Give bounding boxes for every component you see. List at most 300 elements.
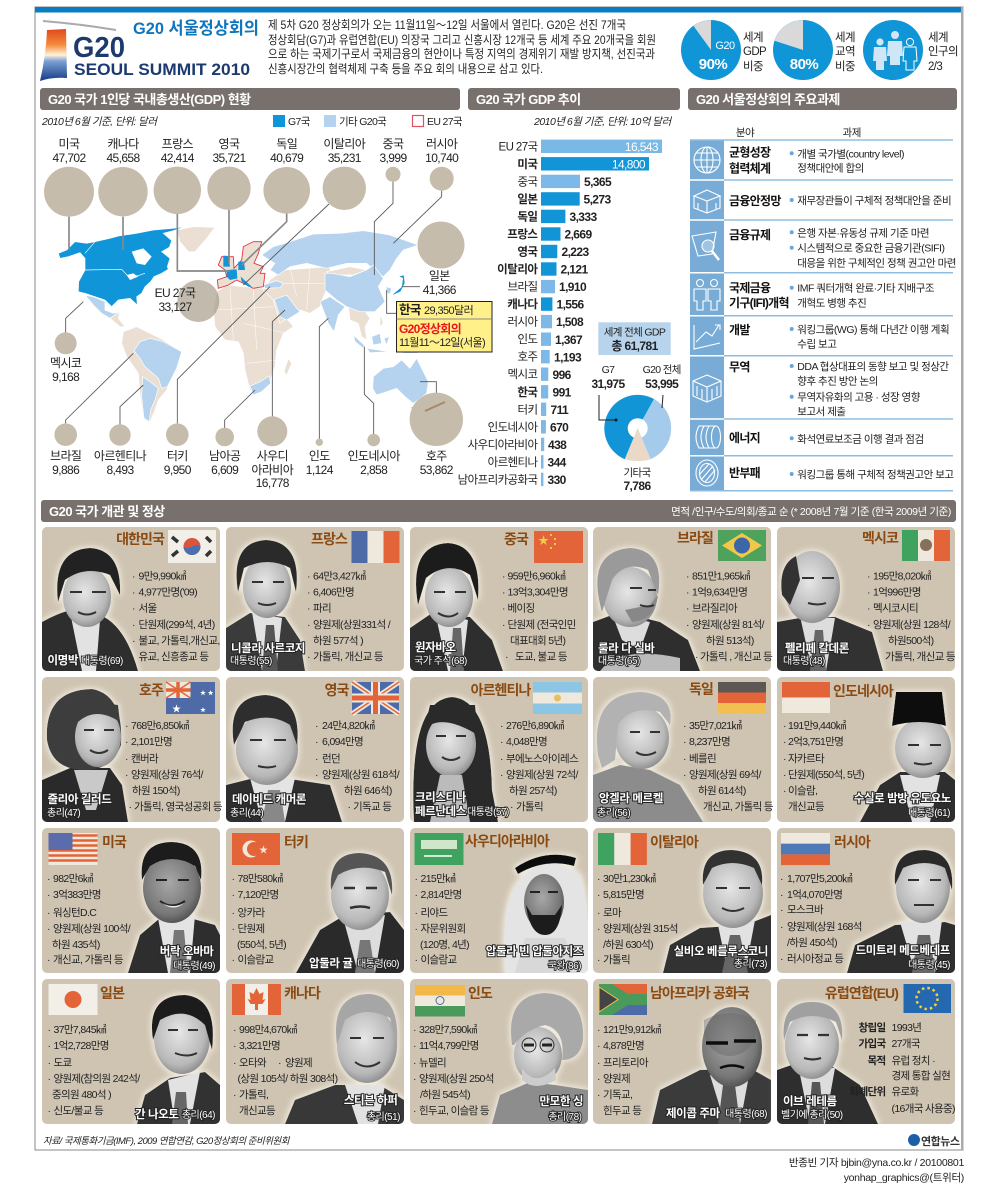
heading: G20 country overview: 면적 /인구/수도/의회/종교 순 (* 2008년 7월 기준 (한국 2009년 기준) — [671, 506, 951, 518]
facts: Japan: · — [48, 1105, 50, 1117]
facts: South Africa: · — [597, 1089, 600, 1101]
flag: Russia — [781, 833, 830, 865]
title: G20 서울정상회의 — [133, 19, 259, 38]
facts: South Africa: · — [597, 1024, 600, 1036]
panel: Argentina — [410, 677, 588, 822]
bar chart: GDP by country: 아르헨티나 — [488, 456, 539, 469]
pie: world GDP share: 90% — [699, 56, 727, 73]
name: United States: 미국 — [102, 834, 127, 850]
logo: Yonhap News: 연합뉴스 — [921, 1134, 960, 1148]
name: Indonesia: 인도네시아 — [833, 683, 894, 699]
facts: France: · — [307, 602, 310, 614]
caption: Lee Myung-bak: 이명박 — [48, 653, 79, 667]
GDP per capita circle: South Africa — [209, 428, 241, 477]
caption: Stephen Harper: 총리(51) — [367, 1111, 400, 1123]
facts: Italy: 가톨릭 — [603, 954, 630, 966]
facts: Turkey: · — [232, 873, 234, 885]
facts: Australia: · — [125, 720, 128, 732]
GDP per capita circle: UK: 영국 — [219, 137, 240, 151]
facts: Canada: · — [233, 1040, 236, 1052]
name: South Korea: 대한민국 — [116, 531, 165, 547]
GDP per capita circle: Mexico: 멕시코 — [50, 356, 82, 370]
facts: India: · — [413, 1073, 416, 1085]
callout: world total GDP — [598, 322, 671, 355]
facts: India: 11억4,799만명 — [419, 1040, 479, 1052]
map: Africa — [213, 285, 293, 395]
facts: United Kingdom: 하원 646석) — [344, 784, 392, 797]
agenda items: 향후 추진 방안 논의 — [797, 376, 878, 388]
facts: South Africa: 프리토리아 — [603, 1057, 649, 1069]
bar chart: GDP by country: 991 — [552, 385, 572, 399]
facts: South Africa: · — [597, 1040, 600, 1052]
facts: Canada: 3,321만명 — [239, 1040, 280, 1052]
field labels: 개발 — [729, 323, 750, 337]
facts: Japan: 양원제(참의원 242석/ — [54, 1073, 140, 1085]
table: summit agenda: 분야 — [736, 126, 755, 139]
facts: Saudi Arabia: 리야드 — [420, 906, 449, 919]
logo: G20 Seoul Summit 2010: SEOUL SUMMIT 2010 — [74, 61, 250, 79]
caption: Manmohan Singh: 총리(78) — [548, 1111, 582, 1123]
field labels: 무역 — [729, 360, 750, 374]
facts: United States: 982만6㎢ — [53, 873, 94, 885]
facts: Italy: 5,815만명 — [603, 889, 644, 901]
name: Russia: 러시아 — [834, 834, 871, 850]
note: GDP per capita basis: 2010년 6월 기준, 단위: 달러 — [41, 116, 158, 128]
facts: United States: 하원 435석) — [52, 938, 100, 951]
facts: Turkey: · — [232, 923, 234, 935]
facts: United Kingdom: · — [315, 753, 318, 765]
facts: Saudi Arabia: · — [414, 923, 418, 935]
flag: France — [352, 531, 400, 563]
bar chart: GDP by country: 1,910 — [559, 280, 587, 294]
facts: Mexico: 멕시코시티 — [873, 602, 918, 614]
bar chart: GDP by country: 344 — [548, 456, 567, 470]
facts: France: 하원 577석 ) — [313, 634, 363, 647]
caption: Barack Obama: 버락 오바마 — [160, 945, 214, 958]
facts: Germany: · — [683, 736, 686, 748]
facts: China: 대표대회 5년) — [510, 635, 566, 647]
facts: Canada: · — [233, 1089, 236, 1101]
facts: China: 베이징 — [508, 602, 535, 614]
donut chart: world GDP split: 53,995 — [645, 377, 679, 391]
facts: Canada: 998만4,670㎢ — [239, 1024, 298, 1036]
name: India: 인도 — [468, 985, 493, 1001]
facts: United States: · — [47, 873, 50, 885]
facts: Saudi Arabia: 자문위원회 — [420, 922, 466, 935]
pie: world GDP share: GDP — [743, 46, 767, 58]
facts: United Kingdom: · — [315, 720, 318, 732]
pie: world trade share — [773, 20, 855, 80]
portrait: Abdullah Gul — [296, 853, 404, 973]
intro paragraph: 정상회담(G7)과 유럽연합(EU) 의장국 그리고 신흥시장 12개국 등 세계 주요 20개국을 회원 — [268, 33, 656, 47]
panel: South Africa — [593, 979, 771, 1124]
field labels: 국제금융 — [729, 280, 771, 295]
facts: Brazil: · — [686, 619, 689, 631]
facts: Turkey: · — [232, 954, 234, 966]
facts: Germany: 8,237만명 — [689, 736, 730, 748]
facts: Indonesia: · — [783, 769, 786, 781]
GDP per capita circle: Turkey: 9,950 — [164, 463, 192, 477]
caption: David Cameron — [230, 792, 307, 819]
facts: France: 양원제(상원331석 / — [313, 619, 391, 631]
facts: Germany: 35만7,021㎢ — [689, 720, 742, 732]
bar chart: GDP by country: 프랑스 — [507, 228, 538, 241]
pie: world trade share: 비중 — [835, 60, 855, 73]
bar chart: GDP by country: 14,800 — [612, 158, 646, 172]
facts: Canada: 오타와 — [239, 1057, 267, 1069]
panel: Turkey — [226, 828, 404, 973]
GDP per capita circle: France — [154, 137, 201, 214]
icon: energy pipes — [696, 426, 720, 448]
facts: European Union: 유로화 — [892, 1086, 920, 1098]
GDP per capita circle: France: 프랑스 — [162, 137, 194, 151]
GDP per capita circle: Brazil — [50, 423, 81, 477]
field labels: 금융안정망 — [729, 194, 781, 208]
facts: France: 64만3,427㎢ — [313, 570, 366, 582]
facts: United Kingdom: · — [315, 736, 318, 748]
facts: Russia: · — [780, 953, 783, 965]
GDP per capita circle: Argentina: 8,493 — [106, 463, 134, 477]
map legend — [273, 115, 463, 128]
GDP per capita circle: Brazil: 브라질 — [50, 449, 81, 463]
facts: Mexico: 1억996만명 — [873, 586, 921, 598]
facts: India: · — [413, 1105, 416, 1117]
bar chart: GDP by country: 16,543 — [625, 140, 659, 154]
caption: Naoto Kan: 간 나오토 — [135, 1107, 179, 1121]
flag: Japan — [48, 984, 98, 1015]
name: Saudi Arabia: 사우디아라비아 — [465, 833, 550, 849]
caption: King Abdullah: 압둘라 빈 압둘아지즈 — [486, 945, 584, 958]
caption: King Abdullah: 국왕(86) — [548, 960, 581, 972]
agenda items: 대응을 위한 구체적인 정책 권고안 마련 — [797, 256, 956, 269]
icon: development chart — [694, 325, 720, 349]
portrait: Felipe Calderon — [777, 551, 883, 671]
callout: Korea and summit date: 한국 — [399, 302, 421, 317]
facts: European Union: 창립일 — [858, 1021, 886, 1034]
GDP per capita circle: UK — [207, 137, 251, 210]
icon: magnifier — [692, 232, 719, 260]
caption: Felipe Calderon — [783, 641, 850, 667]
caption: Angela Merkel — [597, 791, 663, 819]
facts: Japan: 도쿄 — [54, 1057, 73, 1069]
facts: South Korea: 서울 — [138, 602, 158, 614]
facts: United States: 개신교, 가톨릭 등 — [53, 954, 124, 966]
intro paragraph: 신흥시장간의 협력체제 구축 등을 주요 회의 내용으로 삼고 있다. — [268, 62, 543, 76]
flag: South Africa — [599, 984, 647, 1015]
portrait: Barack Obama — [128, 842, 220, 973]
facts: Turkey: 78만580㎢ — [238, 873, 283, 885]
facts: France: 6,406만명 — [313, 586, 354, 598]
logo: G20 Seoul Summit 2010: G20 — [73, 32, 125, 64]
flag: China — [534, 531, 583, 563]
GDP per capita circle: Germany: 40,679 — [270, 151, 304, 165]
facts: Japan: 37만7,845㎢ — [54, 1024, 107, 1036]
flag: China: ★ — [538, 535, 549, 547]
caption: Nicolas Sarkozy: 대통령(55) — [230, 655, 272, 667]
bar chart: GDP by country: 독일 — [517, 209, 538, 223]
facts: South Korea: 9만9,990㎢ — [138, 570, 187, 582]
facts: Argentina: · — [500, 736, 503, 748]
facts: South Korea: · — [132, 619, 135, 631]
facts: European Union: (16개국 사용중) — [892, 1103, 955, 1115]
facts: Australia: · — [125, 736, 128, 748]
caption: Cristina Fernandez: 대통령(57) — [467, 806, 509, 818]
facts: United Kingdom: · — [348, 801, 350, 813]
name: Canada: 캐나다 — [284, 985, 321, 1001]
map legend: 기타 G20국 — [339, 116, 387, 128]
GDP per capita circle: Argentina — [94, 424, 147, 477]
callout: world total GDP: 세계 전체 GDP — [604, 326, 666, 338]
facts: United States: 3억383만명 — [53, 889, 101, 901]
field labels: 반부패 — [729, 466, 761, 480]
facts: South Korea: 4,977만명('09) — [138, 586, 197, 598]
facts: Canada: · — [233, 1024, 236, 1036]
flag: South Korea — [168, 530, 216, 563]
field labels: 협력체계 — [729, 160, 771, 176]
caption: Manmohan Singh — [539, 1094, 583, 1123]
facts: Brazil: · — [695, 651, 698, 663]
portrait: Lee Myung-bak — [42, 548, 138, 671]
facts: Italy: 로마 — [603, 907, 622, 919]
caption: Cristina Fernandez — [415, 790, 509, 818]
facts: Italy: · — [597, 923, 600, 935]
name: China: 중국 — [504, 531, 529, 547]
facts: Brazil: · — [686, 586, 689, 598]
facts: South Africa: 힌두교 등 — [603, 1105, 642, 1117]
GDP per capita circle: Mexico — [50, 332, 82, 384]
facts: Canada: (상원 105석/ 하원 308석) — [238, 1072, 338, 1085]
facts: Argentina: 276만6,890㎢ — [506, 720, 565, 732]
panel: Mexico — [777, 527, 956, 671]
facts: United States: · — [47, 907, 50, 919]
GDP per capita circle: EU: EU 27국 — [155, 286, 196, 300]
flag: Turkey — [232, 833, 280, 865]
GDP per capita circle: USA: 47,702 — [52, 151, 86, 165]
facts: Brazil: 1억9,634만명 — [692, 586, 747, 598]
icon: people — [694, 280, 720, 310]
caption: Jacob Zuma — [666, 1106, 767, 1120]
facts: Argentina: 부에노스아이레스 — [506, 753, 579, 765]
facts: European Union: 1993년 — [892, 1022, 921, 1034]
portrait: Stephen Harper — [285, 994, 404, 1124]
portrait: Silvio Berlusconi — [663, 850, 771, 973]
facts: Germany: · — [683, 769, 686, 781]
caption: Dmitry Medvedev: 대통령(45) — [908, 959, 950, 971]
facts: United States: 워싱턴D.C — [53, 906, 97, 919]
flag: Germany — [718, 682, 766, 714]
GDP per capita circle: EU — [155, 280, 219, 322]
portrait: David Cameron — [226, 695, 342, 822]
facts: Mexico: 하원500석) — [888, 634, 934, 647]
caption: Cristina Fernandez: 크리스티나 — [415, 790, 467, 804]
map legend: EU 27국 — [427, 116, 463, 128]
bar chart: GDP by country: 인도네시아 — [488, 421, 539, 434]
facts: Indonesia: · — [783, 753, 786, 765]
panel: France — [226, 527, 404, 671]
caption: King Abdullah — [486, 945, 584, 972]
facts: Saudi Arabia: · — [414, 873, 418, 885]
facts: Argentina: · — [500, 769, 503, 781]
facts: Italy: · — [597, 889, 600, 901]
facts: Russia: · — [780, 873, 783, 885]
portrait: Hu Jintao — [410, 543, 503, 671]
facts: Russia: 양원제(상원 168석 — [787, 921, 862, 933]
caption: Angela Merkel: 앙겔라 메르켈 — [599, 791, 663, 805]
flag: Australia: ★ — [172, 704, 181, 714]
facts: European Union: 가입국 — [858, 1037, 886, 1050]
agenda items: 워킹그룹 통해 구체적 정책권고안 보고 — [797, 468, 954, 481]
facts: European Union: 유럽 정치 · — [892, 1054, 935, 1067]
caption: Silvio Berlusconi — [674, 945, 768, 970]
pie: world population share: 2/3 — [928, 61, 942, 73]
icon: bank building — [694, 190, 720, 213]
credit — [789, 1157, 964, 1183]
caption: Susilo Yudhoyono: 대통령(61) — [908, 807, 950, 819]
facts: Russia: · — [780, 904, 783, 916]
facts: South Korea: · — [132, 602, 135, 614]
intro paragraph — [268, 18, 656, 76]
facts: Brazil: 양원제(상원 81석/ — [692, 619, 765, 631]
callout: Korea and summit date: 11월11～12일(서울) — [399, 335, 485, 349]
caption: Lee Myung-bak — [48, 653, 123, 667]
facts: India: 뉴델리 — [419, 1057, 446, 1069]
GDP per capita circle: Japan: 일본 — [429, 269, 450, 283]
facts: Brazil: 하원 513석) — [706, 634, 754, 647]
heading: GDP per capita — [40, 88, 460, 110]
name: Brazil: 브라질 — [677, 530, 713, 546]
bar chart: GDP by country: 한국 — [517, 385, 538, 399]
caption: Hu Jintao: 국가 주석(68) — [414, 655, 467, 667]
caption: Yves Leterme: 벨기에 총리(50) — [781, 1109, 843, 1121]
facts: Japan: 신도/불교 등 — [54, 1105, 104, 1117]
portrait: Yves Leterme — [777, 1002, 878, 1124]
facts: Turkey: · — [232, 907, 234, 919]
facts: Argentina: 4,048만명 — [506, 736, 547, 748]
facts: Mexico: · — [867, 619, 870, 631]
agenda items: 화석연료보조금 이행 결과 점검 — [797, 433, 924, 445]
facts: China: · — [502, 586, 505, 598]
facts: Germany: 양원제(상원 69석/ — [689, 769, 762, 781]
bar chart: GDP by country: 711 — [550, 403, 569, 417]
GDP per capita circle: Australia — [410, 393, 463, 477]
heading: GDP trend — [468, 88, 680, 110]
caption: Naoto Kan: 총리(64) — [182, 1109, 215, 1121]
bar chart: GDP by country: 미국 — [517, 158, 538, 171]
GDP per capita circle: China: 중국 — [383, 137, 404, 151]
table: summit agenda — [690, 126, 956, 491]
pie: world GDP share: 세계 — [743, 31, 763, 44]
name: Italy: 이탈리아 — [650, 834, 699, 850]
caption: Lula da Silva — [598, 641, 655, 667]
facts: Russia: 러시아정교 등 — [787, 953, 844, 965]
GDP per capita circle: USA — [44, 137, 94, 217]
bar chart: GDP by country: 2,669 — [564, 228, 592, 242]
panel: Italy — [593, 828, 771, 973]
flag: Saudi Arabia — [414, 833, 464, 865]
caption: Yves Leterme: 이브 레테름 — [783, 1094, 838, 1108]
facts: Brazil: · — [686, 602, 689, 614]
panel: Canada — [226, 979, 404, 1124]
flag: Australia: ★ — [200, 707, 206, 714]
facts: South Korea: 불교, 가톨릭,개신교, — [138, 635, 220, 647]
agenda items: 워킹그룹(WG) 통해 다년간 이행 계획 — [797, 323, 949, 336]
facts: South Korea: 단원제(299석, 4년) — [138, 619, 215, 631]
facts: Turkey: 앙카라 — [238, 907, 266, 919]
facts: Argentina: · — [500, 720, 503, 732]
name: France: 프랑스 — [311, 531, 348, 547]
flag: Italy — [598, 833, 647, 865]
facts: United Kingdom: 런던 — [322, 753, 340, 765]
facts: South Africa: · — [597, 1073, 600, 1085]
field labels: 에너지 — [729, 431, 760, 445]
caption: Lee Myung-bak: 대통령(69) — [81, 655, 123, 667]
facts: Germany: 베를린 — [689, 753, 716, 765]
facts: United Kingdom: 24만4,820㎢ — [322, 720, 375, 732]
facts: European Union — [849, 1021, 955, 1115]
facts: India: 힌두교, 이슬람 등 — [419, 1104, 490, 1117]
facts: India: · — [413, 1040, 416, 1052]
facts: Italy: /하원 630석) — [603, 938, 653, 951]
map connector lines — [66, 182, 442, 440]
agenda items: 정책대안에 합의 — [797, 162, 864, 174]
facts: Indonesia: 2억3,751만명 — [788, 736, 843, 748]
flag: Turkey: ★ — [259, 845, 268, 855]
caption: Hu Jintao — [414, 640, 467, 667]
facts: Indonesia: · — [783, 720, 786, 732]
portrait: Dmitry Medvedev — [847, 850, 955, 973]
caption: David Cameron: 데이비드 캐머론 — [232, 792, 307, 806]
caption: Abdullah Gul: 대통령(60) — [357, 958, 399, 970]
facts: China: 959만6,960㎢ — [508, 570, 566, 582]
heading: GDP per capita: G20 국가 1인당 국내총생산(GDP) 현황 — [48, 92, 251, 107]
flag: India — [415, 985, 465, 1016]
facts: Mexico: 195만8,020㎢ — [873, 570, 932, 582]
facts: India: 328만7,590㎢ — [419, 1024, 478, 1036]
flag: United States — [48, 833, 98, 865]
facts: France: 가톨릭, 개신교 등 — [313, 651, 384, 663]
caption: Manmohan Singh: 만모한 싱 — [539, 1094, 583, 1108]
facts: Turkey: 이슬람교 — [238, 953, 275, 966]
GDP per capita circle: Japan — [418, 222, 464, 297]
GDP per capita circle: Indonesia: 2,858 — [360, 463, 388, 477]
GDP per capita circle: Italy: 이탈리아 — [323, 137, 366, 151]
panel: Australia — [42, 677, 223, 822]
facts: India: · — [413, 1024, 416, 1036]
facts: Canada: 양원제 — [285, 1057, 312, 1069]
bar chart: GDP by country: 이탈리아 — [497, 262, 538, 276]
bar chart: GDP by country: 670 — [550, 420, 569, 434]
facts: Japan: · — [48, 1024, 50, 1036]
map: Asia — [262, 231, 418, 340]
facts: Japan: 중의원 480석 ) — [52, 1089, 111, 1101]
panel: Brazil — [593, 527, 773, 671]
panel: South Korea — [42, 527, 220, 671]
bar chart: GDP by country: 1,556 — [556, 298, 584, 312]
flag: Indonesia — [782, 682, 830, 713]
facts: South Korea: 유교, 신흥종교 등 — [138, 650, 209, 663]
pie: world GDP share: 비중 — [743, 60, 763, 73]
facts: Turkey: 7,120만명 — [238, 889, 279, 901]
map: EU outline — [217, 242, 265, 288]
bar chart: GDP by country: 3,333 — [570, 210, 597, 224]
caption: Nicolas Sarkozy: 니콜라 사르코지 — [231, 642, 305, 655]
portrait: Susilo Yudhoyono — [860, 692, 955, 822]
flag: Canada — [232, 984, 281, 1015]
GDP per capita circle: India — [306, 439, 334, 477]
facts: China: · — [502, 619, 505, 631]
facts: Indonesia: 191만9,440㎢ — [788, 720, 847, 732]
facts: United Kingdom: 양원제(상원 618석/ — [322, 769, 400, 781]
